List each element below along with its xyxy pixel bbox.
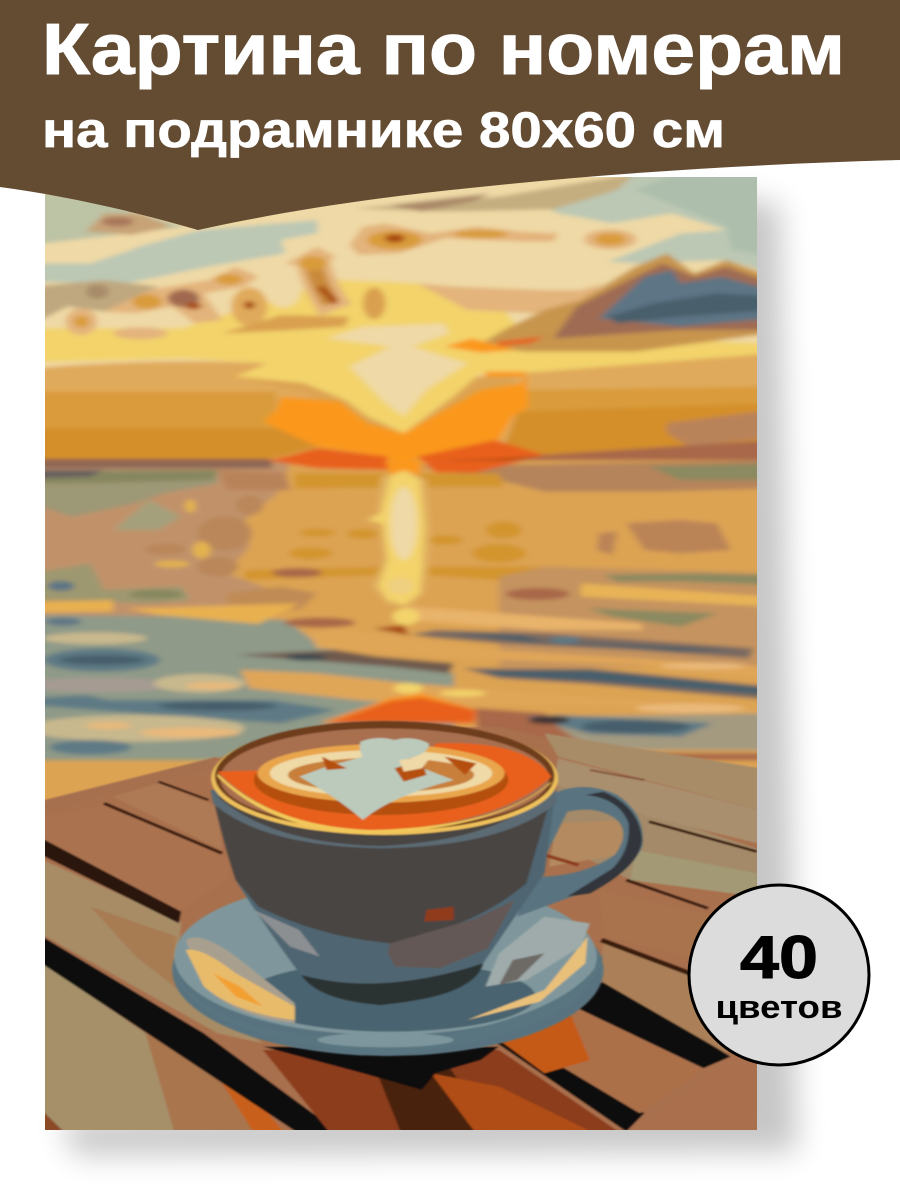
cup body (211, 790, 556, 1005)
badge: 40 colors: цветов (716, 989, 842, 1025)
header banner (0, 0, 900, 230)
cup handle (517, 787, 643, 917)
cup (211, 721, 643, 1005)
saucer (172, 878, 604, 1056)
painting: coffee cup at sunset (25, 170, 772, 1140)
coffee surface (210, 745, 560, 836)
badge: 40 colors (689, 885, 869, 1065)
latte art heart (299, 738, 454, 820)
badge: 40 colors: 40 (740, 924, 818, 991)
sky (45, 177, 757, 463)
canvas drop shadow (60, 195, 797, 1155)
wooden table (31, 727, 772, 1140)
subtitle: на подрамнике 80x60 см (42, 102, 725, 158)
title: Картина по номерам (42, 10, 845, 90)
sea with sun reflection (25, 460, 772, 760)
